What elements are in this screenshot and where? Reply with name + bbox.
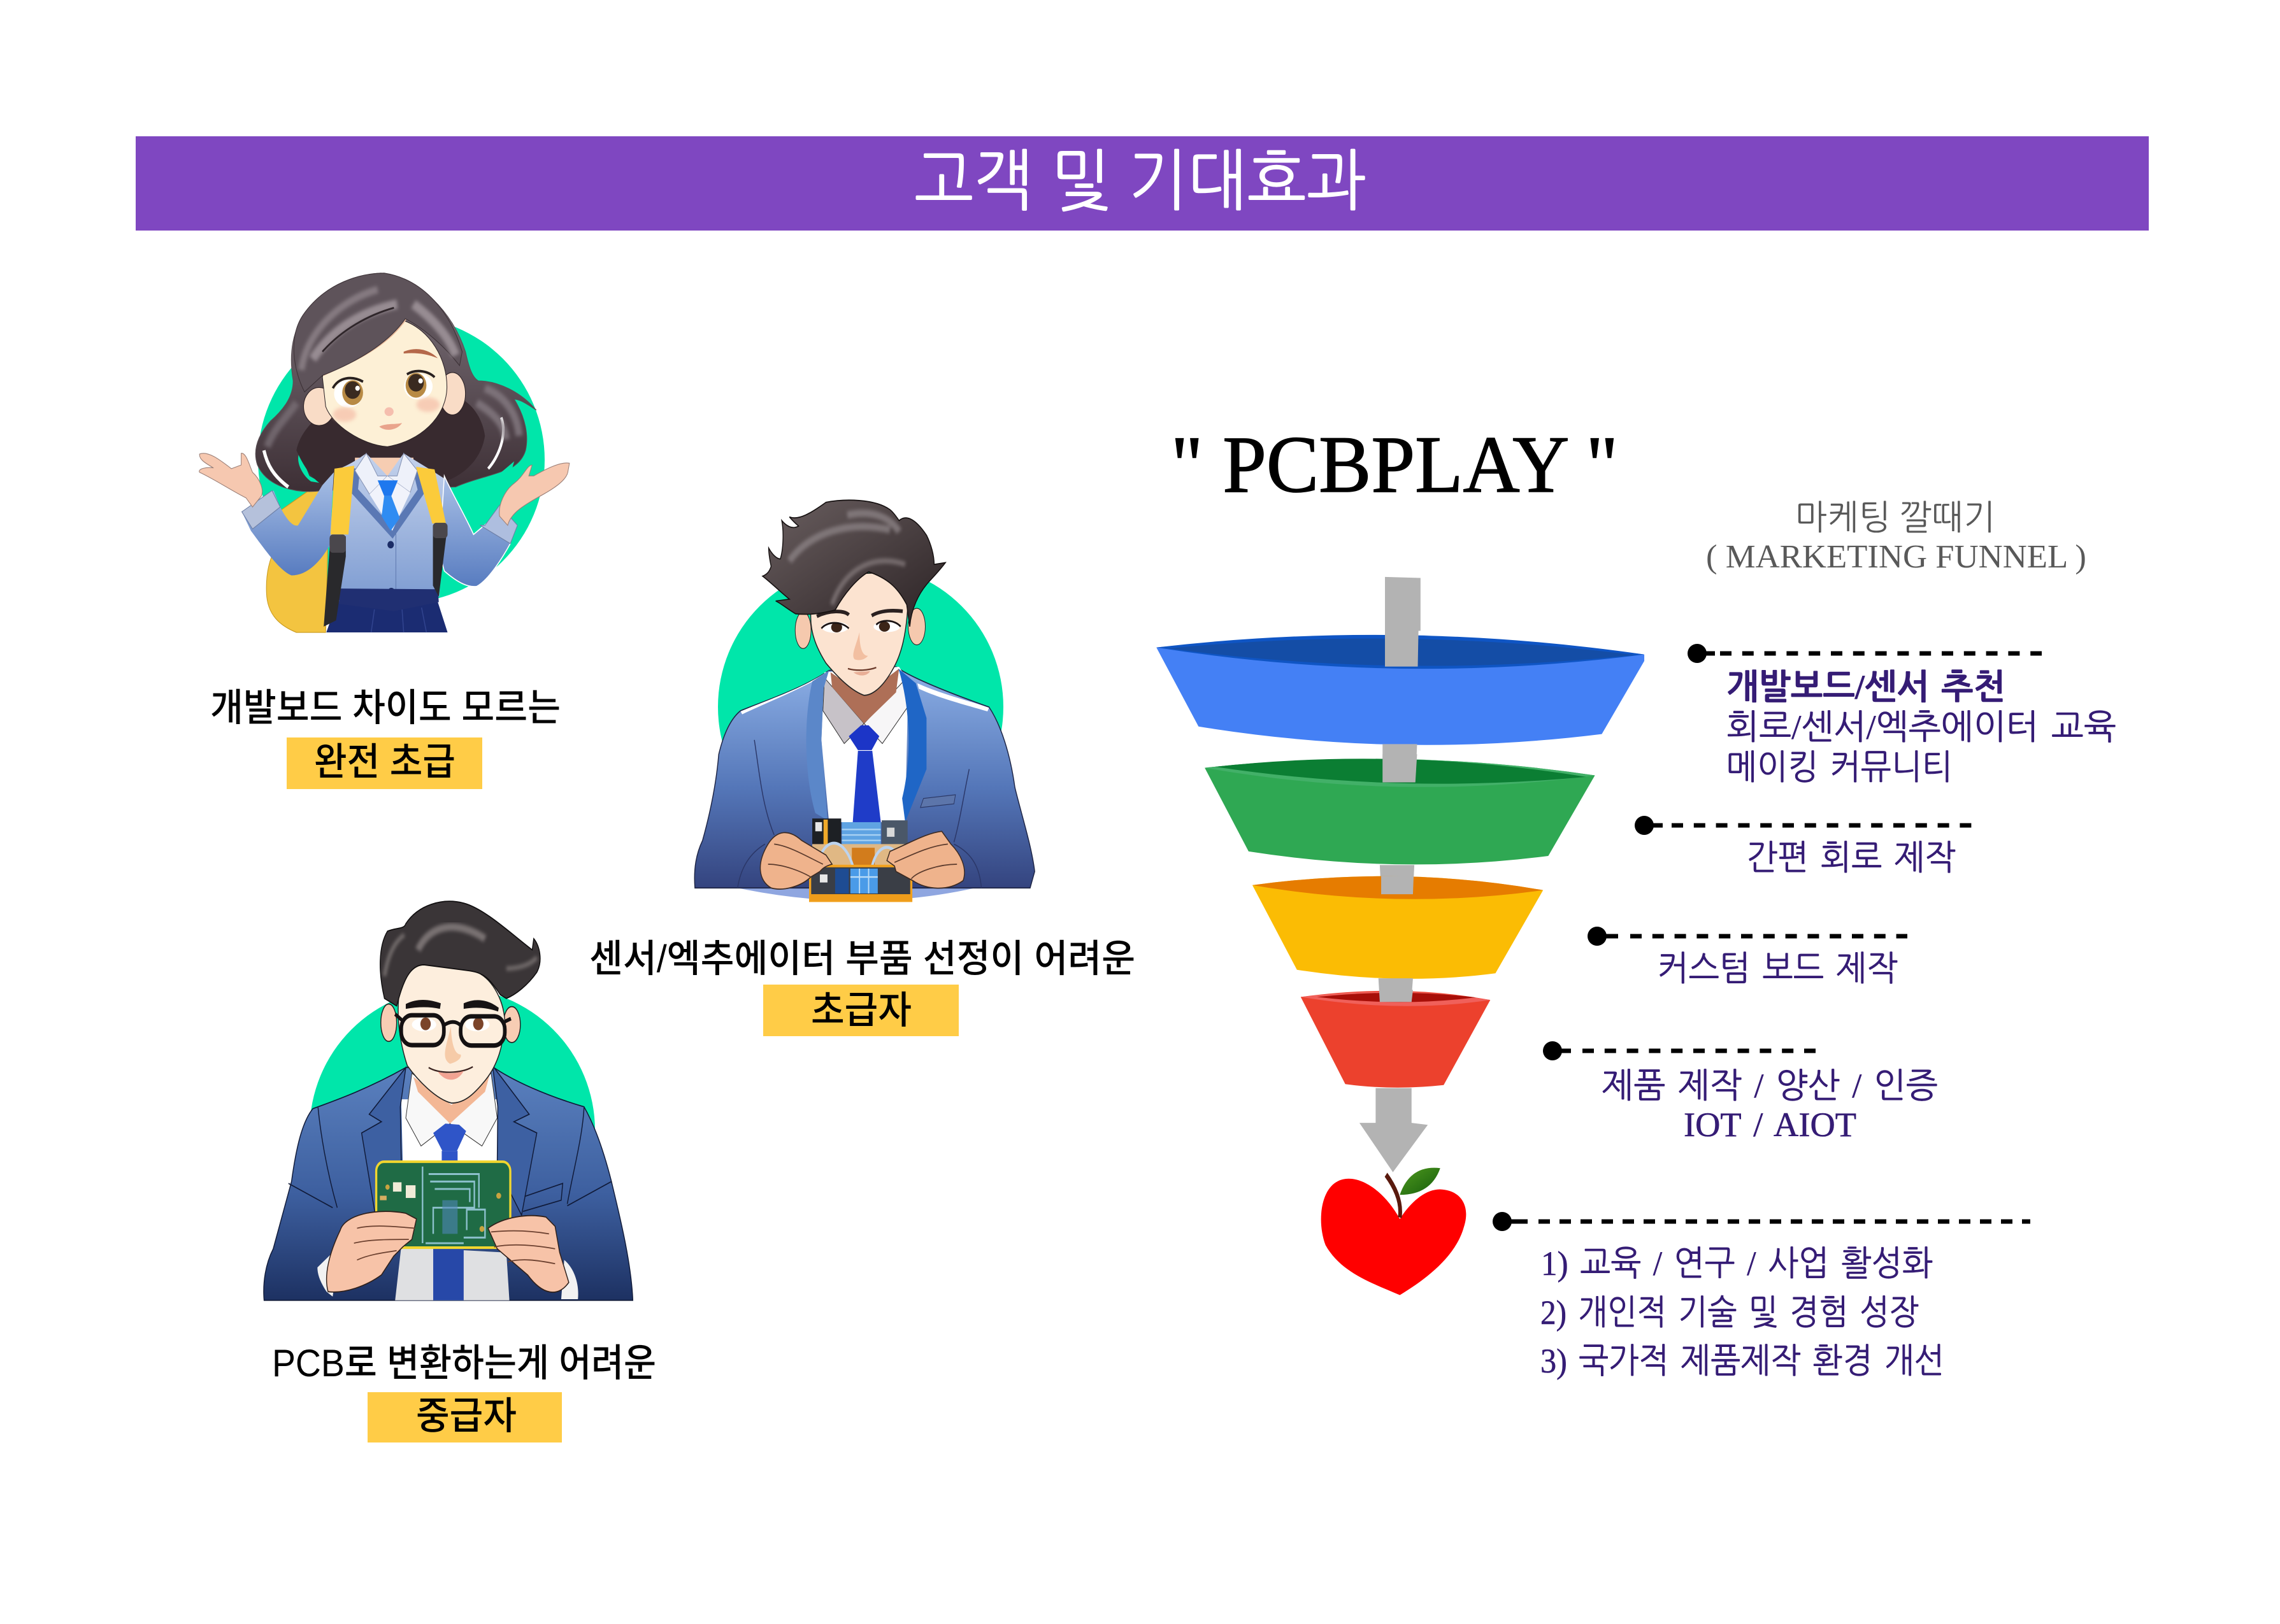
badge: intermediate	[368, 1392, 562, 1442]
callout: stage 2	[1635, 816, 1972, 877]
funnel layer: yellow	[1252, 876, 1543, 979]
character: schoolgirl	[199, 273, 570, 632]
callout: stage 3	[1588, 927, 1907, 988]
badge: complete beginner: 완전 초급	[314, 741, 455, 783]
badge: beginner: 초급자	[811, 989, 912, 1032]
subheading: marketing funnel	[1706, 500, 2086, 575]
icon: heart apple	[1321, 1168, 1466, 1295]
badge: beginner	[763, 985, 959, 1036]
panel: beginner	[694, 500, 1035, 901]
callout: stage 1: 개발보드/센서 추천	[1726, 668, 2005, 706]
label: beginner description: 센서/엑추에이터 부품 선정이 어려운	[589, 937, 1135, 980]
icon: green circle	[310, 988, 595, 1273]
callout: stage 4	[1543, 1041, 1938, 1144]
subheading: marketing funnel: 마케팅 깔때기	[1795, 500, 1995, 534]
funnel layer: red	[1301, 990, 1490, 1088]
callout: stage 4: 제품 제작 / 양산 / 인증	[1602, 1067, 1938, 1105]
icon: green circle	[718, 564, 1003, 850]
callout: outcomes: 3) 국가적 제품제작 환경 개선	[1540, 1342, 1944, 1380]
badge: intermediate: 중급자	[416, 1395, 517, 1437]
callout: outcomes	[1493, 1212, 2030, 1380]
callout: stage 1	[1688, 644, 2116, 787]
label: complete beginner description: 개발보드 차이도 모르는	[210, 687, 561, 729]
callout: outcomes: 1) 교육 / 연구 / 사업 활성화	[1541, 1244, 1933, 1283]
icon: green circle	[258, 317, 545, 603]
title text: 고객 및 기대효과	[914, 147, 1366, 213]
callout: stage 2: 간편 회로 제작	[1747, 839, 1956, 877]
subheading: marketing funnel: ( MARKETING FUNNEL )	[1706, 539, 2086, 575]
character: man with sensors	[694, 500, 1035, 901]
chart: marketing funnel	[1156, 577, 1644, 1295]
callout: outcomes: 2) 개인적 기술 및 경험 성장	[1540, 1293, 1919, 1332]
callout: stage 4: IOT / AIOT	[1684, 1106, 1856, 1144]
character: man with PCB	[264, 901, 633, 1300]
callout: stage 1: 메이킹 커뮤니티	[1726, 748, 1953, 787]
arrow: funnel to outcome	[1359, 1088, 1428, 1172]
callout: stage 3: 커스텀 보드 제작	[1658, 950, 1898, 988]
title banner	[136, 136, 2149, 231]
label: intermediate description: PCB로 변환하는게 어려운	[272, 1342, 656, 1385]
panel: intermediate	[264, 901, 633, 1300]
badge: complete beginner	[287, 737, 482, 789]
panel: complete beginner	[199, 273, 570, 632]
funnel layer: blue	[1156, 630, 1644, 745]
funnel layer: green	[1205, 754, 1595, 864]
callout: stage 1: 회로/센서/엑추에이터 교육	[1726, 708, 2116, 746]
heading: PCBPLAY: " PCBPLAY "	[1171, 420, 1618, 509]
